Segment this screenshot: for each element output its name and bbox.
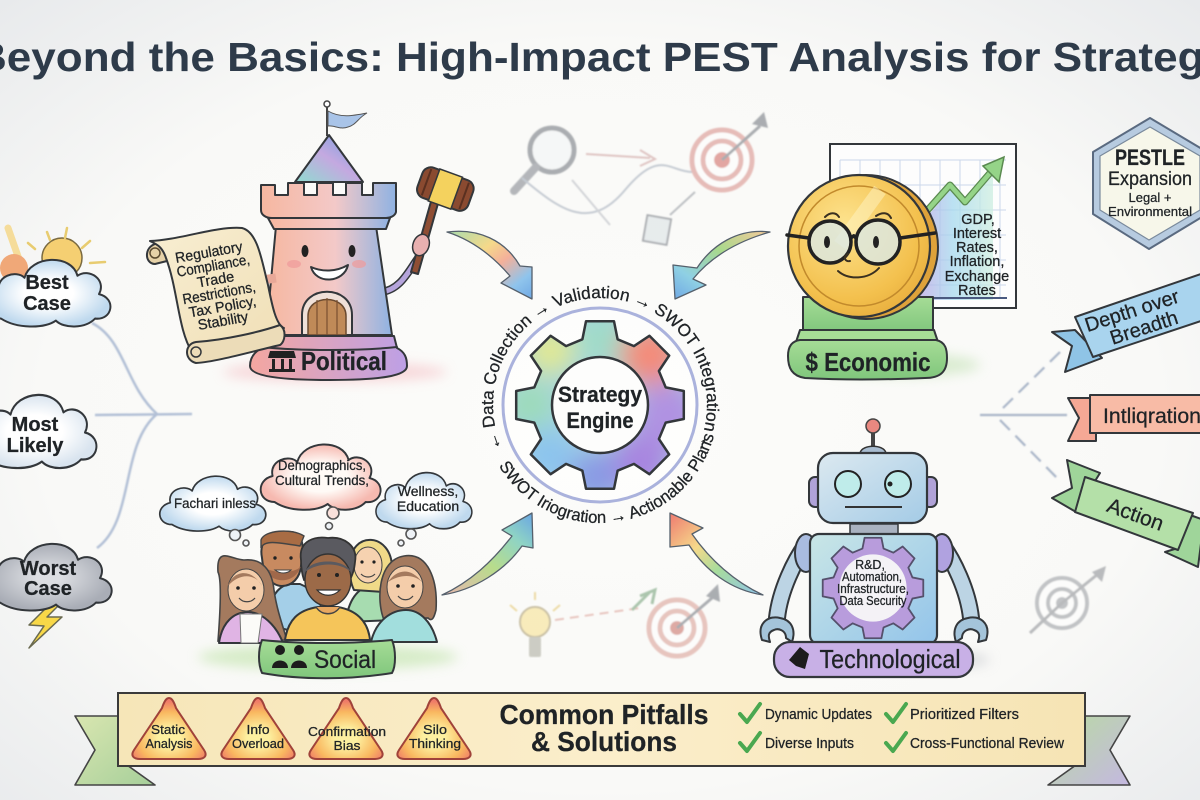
chart text: GDP, <box>961 212 995 228</box>
left arm <box>262 278 276 280</box>
technological robot character <box>761 419 990 677</box>
pestle expansion badge: Environmental <box>1108 204 1192 219</box>
hub label <box>558 382 643 433</box>
tower face <box>287 245 366 280</box>
pestle expansion badge: Legal + <box>1128 190 1172 205</box>
tower roof <box>295 135 363 182</box>
chest gear: Automation, <box>842 570 902 584</box>
thought cloud: centre <box>261 444 381 510</box>
right arm <box>381 258 418 292</box>
icon: government building <box>268 351 296 372</box>
scenario cloud: worst case: Case <box>24 578 72 600</box>
faint decoration: magnifier, target and clipboard <box>514 112 768 245</box>
ribbon: integration <box>1068 395 1200 441</box>
hub label: Engine <box>566 408 634 433</box>
hub label: Strategy <box>558 382 643 407</box>
glasses <box>787 220 935 264</box>
green stand <box>788 297 947 380</box>
social label plate: Social <box>314 646 376 674</box>
cycle labels lower arc: SWOT Iriogration → Actionable Plans <box>500 434 714 524</box>
warning triangle: confirmation bias <box>308 698 386 759</box>
chart text: Exchange <box>945 269 1009 285</box>
icon: two people <box>272 645 307 668</box>
robot neck <box>850 524 898 534</box>
banner tail left <box>75 716 155 785</box>
warning triangle: info overload: Overload <box>232 736 284 751</box>
chart text: Rates <box>958 283 996 299</box>
robot ears <box>809 477 823 507</box>
warning triangle: silo thinking: Thinking <box>409 736 461 751</box>
thought cloud: left: Fachari inless <box>174 495 256 511</box>
warning triangle: confirmation bias: Confirmation <box>308 724 386 739</box>
political label: Political <box>301 346 387 376</box>
scenario cloud: most likely: Likely <box>7 435 64 457</box>
warning triangle: info overload <box>221 698 295 759</box>
person: centre front <box>285 538 370 640</box>
icon: flag <box>324 101 367 136</box>
warning triangle: static analysis: Analysis <box>146 736 193 751</box>
pitfalls banner <box>75 693 1130 785</box>
solutions checklist <box>740 704 1064 752</box>
banner body <box>118 693 1085 766</box>
scroll text <box>173 238 262 336</box>
pestle expansion badge <box>1093 118 1200 249</box>
thought cloud: left <box>160 476 266 531</box>
robot eyes <box>835 471 911 507</box>
person: long-haired woman left <box>218 556 287 643</box>
scenario cloud: best case: Case <box>23 293 71 315</box>
scroll text: Stability <box>197 309 250 334</box>
scroll text: Restrictions, <box>181 280 257 308</box>
solutions checklist: Prioritized Filters <box>910 707 1019 723</box>
chart text: Inflation, <box>950 254 1004 270</box>
scenario cloud: best case <box>0 228 110 326</box>
chest gear: Infrastructure, <box>837 582 909 596</box>
tower door <box>302 292 352 335</box>
person: bearded man <box>261 531 326 630</box>
arrow: economic to engine <box>673 231 770 299</box>
cycle labels upper arc: ← Data Collection → Validation → SWOT Integration ← <box>482 286 720 450</box>
banner heading: & Solutions <box>531 726 677 757</box>
multicolour gear <box>514 320 686 490</box>
technological label plate <box>774 642 973 677</box>
solutions checklist: Cross-Functional Review <box>910 736 1064 752</box>
scroll text: Regulatory <box>174 239 245 267</box>
pestle expansion badge: Expansion <box>1108 169 1192 190</box>
chart text <box>945 212 1009 299</box>
strategy engine hub <box>482 286 720 524</box>
faint decoration: light bulb and target <box>510 584 720 657</box>
ribbon: action: Action <box>1104 494 1167 536</box>
chest gear: Data Security <box>840 594 907 608</box>
action connector lines <box>980 352 1067 479</box>
warning triangle: info overload: Info <box>246 722 270 737</box>
scenario cloud: worst case: Worst <box>20 558 76 580</box>
scenario cloud: best case: Best <box>25 272 69 294</box>
scenario cloud: most likely <box>0 395 96 468</box>
tower body <box>266 226 392 335</box>
warning triangle: static analysis <box>132 698 206 759</box>
technological label: Technological <box>820 644 960 674</box>
ribbon: depth over breadth: Depth over <box>1082 286 1182 337</box>
scroll <box>147 228 285 363</box>
line chart panel <box>830 144 1016 308</box>
thought cloud: centre: Demographics, <box>278 457 366 473</box>
political tower character <box>147 101 477 382</box>
ribbon: action <box>1052 460 1200 567</box>
ribbon: integration: Intliqration <box>1103 405 1200 428</box>
person: blonde woman <box>346 540 395 622</box>
antenna <box>860 419 886 453</box>
ribbon: depth over breadth <box>1052 273 1200 372</box>
person: long-haired woman right <box>371 556 437 642</box>
arrow: political to engine <box>447 231 532 299</box>
warning triangle: static analysis: Static <box>151 722 186 737</box>
banner heading <box>500 699 708 757</box>
tower pedestal <box>250 336 407 380</box>
arrow: social to engine <box>442 513 533 595</box>
right arm <box>931 534 987 642</box>
icon: lightning bolt <box>29 604 62 648</box>
economic label: $ Economic <box>806 347 930 377</box>
thought cloud: centre: Cultural Trends, <box>275 472 369 488</box>
chart text: Interest <box>953 226 1001 242</box>
scroll text: Compliance, <box>176 252 251 281</box>
scroll text: Trade <box>196 269 236 291</box>
scenario cloud: most likely: Most <box>12 414 59 436</box>
scenario connector lines <box>92 323 192 548</box>
ribbon: depth over breadth: Breadth <box>1107 307 1181 350</box>
cycle ring <box>503 308 697 502</box>
chest gear: R&D, <box>855 558 885 572</box>
warning triangle: silo thinking: Silo <box>423 722 447 737</box>
thought cloud: right: Wellness, <box>398 483 458 499</box>
economic coin character <box>787 144 1016 380</box>
solutions checklist: Dynamic Updates <box>765 707 872 723</box>
chest gear <box>823 538 923 638</box>
robot head <box>818 453 927 523</box>
banner heading: Common Pitfalls <box>500 699 708 730</box>
warning triangle: confirmation bias: Bias <box>334 738 361 753</box>
gavel <box>410 164 477 274</box>
social label plate <box>259 640 395 678</box>
scenario cloud: worst case <box>0 544 112 648</box>
thought cloud: right <box>376 473 472 529</box>
warning triangle: silo thinking <box>397 698 471 759</box>
thought cloud: right: Education <box>397 498 459 514</box>
battlements <box>261 183 396 218</box>
faint decoration: grey target <box>1030 566 1106 633</box>
icon: circuit blob <box>789 647 809 669</box>
title: Beyond the Basics: High-Impact PEST Analysis for Strategy <box>0 34 1200 80</box>
chart text: Rates, <box>956 240 998 256</box>
group of people <box>198 531 458 670</box>
robot body <box>810 534 937 644</box>
left arm <box>761 534 817 642</box>
coin <box>787 175 938 319</box>
pestle expansion badge: PESTLE <box>1115 145 1185 170</box>
banner tail right <box>1048 716 1130 785</box>
icon: sun <box>0 228 105 282</box>
solutions checklist: Diverse Inputs <box>765 736 854 752</box>
arrow: technological to engine <box>670 513 763 595</box>
scroll text: Tax Policy, <box>188 294 258 321</box>
social thought clouds <box>160 444 472 546</box>
